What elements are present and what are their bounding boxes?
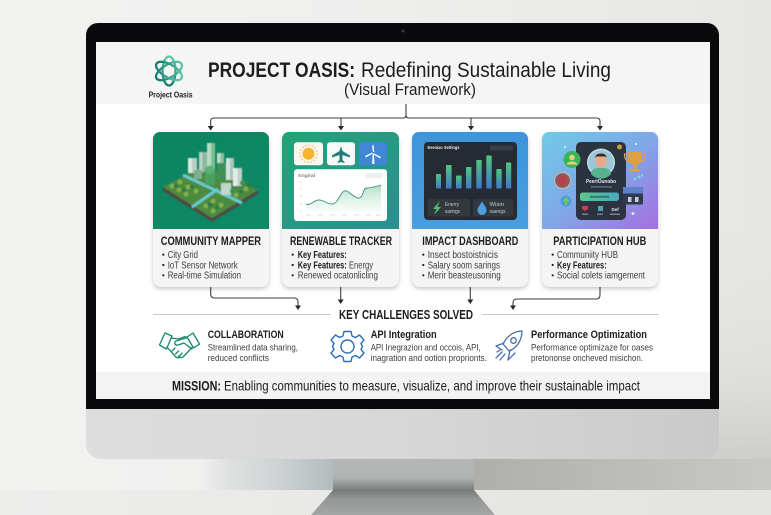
description: Performance optimizaze for oases	[531, 342, 653, 353]
stat: energy savings: sarings	[445, 209, 460, 215]
icon: sparkle trail	[564, 143, 643, 215]
monitor body	[86, 23, 719, 459]
line chart: Sngiral	[298, 173, 315, 178]
description: reduced conflicts	[208, 353, 269, 364]
panel: impact dashboard	[412, 132, 528, 289]
subtitle: (Visual Framework)	[344, 80, 476, 99]
panel: participation hub	[542, 132, 658, 289]
description: inagration and ootion proprionts.	[371, 353, 487, 364]
feature list: Renewed ocatonlicling	[298, 271, 378, 282]
feature list: Key Features:	[298, 260, 347, 271]
description	[371, 342, 487, 364]
stat: water savings: saengs	[490, 209, 506, 215]
feature list: Real-time Simulation	[168, 271, 241, 282]
feature list: IoT Sensor Network	[168, 260, 238, 271]
mission banner: Enabling communities to measure, visualize, and improve their sustainable impact	[224, 378, 640, 394]
card title: PARTICIPATION HUB	[553, 234, 647, 248]
feature list: Communiity HUB	[557, 250, 618, 261]
icon: green user badge	[564, 151, 580, 168]
heading: API Integration	[371, 329, 437, 341]
description: pretononse oncheved misichon.	[531, 353, 643, 364]
dark dashboard: Eeeoiao Settings	[428, 145, 460, 150]
stat: water savings	[473, 199, 513, 216]
illustration: isometric city	[163, 143, 258, 222]
feature list	[422, 250, 501, 282]
icon: small leaf badge	[560, 196, 572, 206]
card title: COMMUNITY MAPPER	[161, 234, 261, 248]
profile card	[576, 142, 626, 220]
mini scoreboard	[623, 187, 643, 204]
icon: sun tile	[294, 142, 323, 165]
description: Streamlined data sharing,	[208, 342, 298, 353]
mission banner: MISSION:	[172, 378, 221, 394]
feature list	[292, 250, 378, 282]
profile card: PeertOunobo	[586, 179, 616, 185]
arrows: cards to challenges	[211, 287, 600, 310]
icon: wind tile	[359, 142, 387, 165]
feature list: Social colets iamgement	[557, 271, 645, 282]
buildings	[188, 158, 197, 173]
icon: rocket	[496, 331, 522, 360]
description: API Inegrazion and occois, API,	[371, 342, 481, 353]
challenge: api integration	[331, 329, 487, 364]
screen	[96, 42, 710, 399]
panel: renewable tracker	[282, 132, 399, 289]
logo caption: Project Oasis	[149, 90, 193, 100]
feature list: Key Features:	[298, 250, 347, 261]
icon: trophy	[624, 152, 646, 172]
title	[208, 59, 611, 82]
section heading: key challenges solved: KEY CHALLENGES SOLVED	[339, 307, 473, 322]
description	[208, 342, 298, 364]
profile card: Def	[612, 207, 619, 212]
icon: handshake	[160, 333, 200, 358]
arrows: header to cards	[208, 104, 603, 130]
header band	[96, 42, 710, 104]
icon: red gauge badge	[554, 172, 570, 188]
stat: energy savings	[428, 199, 470, 216]
icon: plane-shaped turbine tile	[327, 142, 355, 165]
feature list	[162, 250, 241, 282]
panel: community mapper	[153, 132, 269, 289]
challenge: collaboration	[160, 329, 298, 364]
feature list	[552, 250, 645, 282]
title: PROJECT OASIS:	[208, 59, 355, 82]
bar chart	[436, 156, 511, 188]
mission banner	[96, 372, 710, 399]
line chart	[294, 169, 387, 221]
feature list: Insect bostoistnicis	[428, 250, 498, 261]
feature list: Energy	[349, 260, 373, 271]
dark dashboard	[424, 142, 517, 220]
stat: energy savings: Enerry	[445, 202, 459, 208]
title: Redefining Sustainable Living	[361, 59, 611, 82]
icon: gear	[331, 332, 364, 362]
feature list: Merir beasteusoning	[428, 271, 501, 282]
stat: water savings: Wixin	[490, 202, 504, 208]
heading: COLLABORATION	[208, 329, 284, 341]
challenge: performance optimization	[496, 329, 653, 364]
feature list: Salary soom sarings	[428, 260, 500, 271]
description	[531, 342, 653, 364]
icon: project oasis logo	[153, 56, 185, 86]
card title: RENEWABLE TRACKER	[290, 234, 392, 248]
card title: IMPACT DASHBOARD	[422, 234, 519, 248]
feature list: Key Features:	[557, 260, 607, 271]
feature list: City Grid	[168, 250, 198, 261]
heading: Performance Optimization	[531, 329, 647, 341]
monitor stand	[311, 459, 495, 515]
